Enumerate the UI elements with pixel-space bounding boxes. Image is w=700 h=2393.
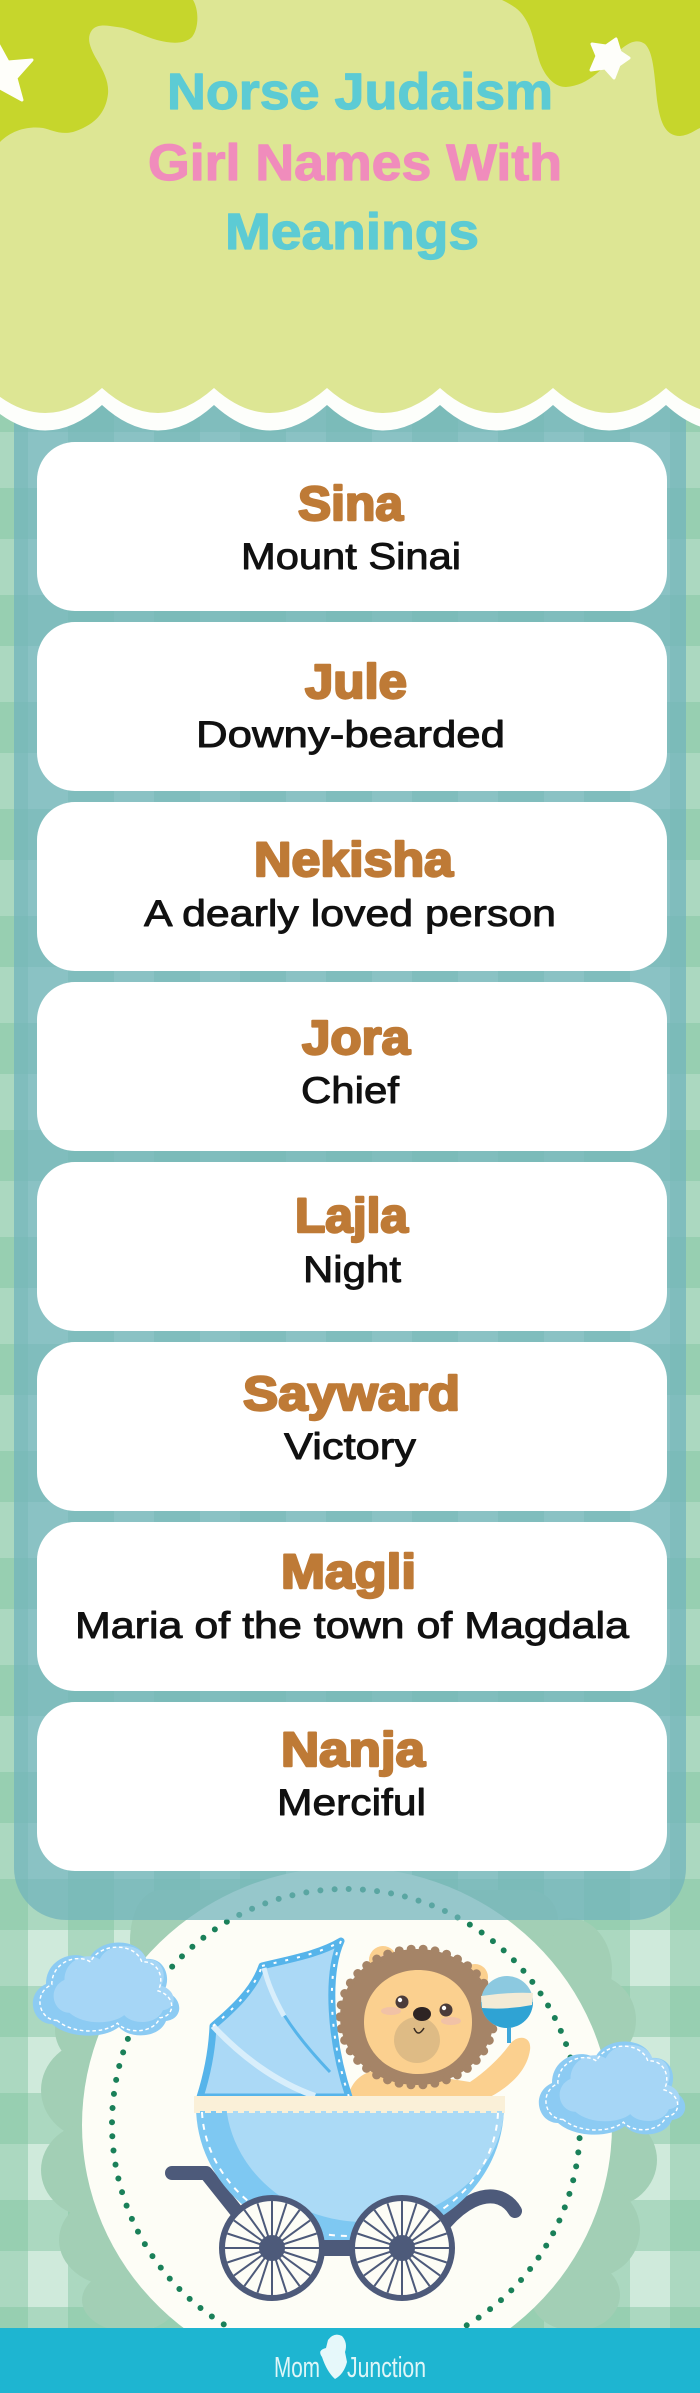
lion mane [340,1949,494,2085]
top-left blob [0,0,197,142]
card: Lajla [37,1162,667,1331]
card: Sina [37,442,667,611]
card: Nekisha: A dearly loved person [144,893,556,934]
card: Lajla: Lajla [295,1190,408,1243]
lion eyes [396,1996,408,2008]
star right [591,39,629,78]
canopy [200,1941,349,2097]
rattle [481,1976,533,2043]
icon: stroller [172,1941,515,2298]
handle right [446,2196,515,2222]
header [0,0,700,430]
card: Lajla: Night [303,1249,402,1290]
lion body and arm [348,2038,530,2097]
card: Nekisha [37,802,667,971]
card: Nanja: Nanja [281,1724,425,1777]
handle left [172,2173,245,2222]
bassinet [194,2096,505,2242]
icon: left cloud [33,1942,179,2036]
wheel right [352,2198,452,2298]
lion mouth [414,2028,424,2033]
footer [0,2328,700,2393]
card: Sina: Mount Sinai [241,536,461,577]
card: Magli [37,1522,667,1691]
icon: lion [340,1946,533,2097]
card: Nanja: Merciful [277,1782,426,1823]
card: Sina: Sina [298,478,403,531]
scalloped white edge [0,0,700,430]
title: Meanings [225,203,479,260]
card: Jule: Downy-bearded [196,714,505,755]
logo text: Mom [274,2352,320,2384]
star left [0,40,32,100]
card: Sayward [37,1342,667,1511]
dotted ring [112,1889,580,2359]
wheel left [222,2198,322,2298]
logo figure [320,2335,347,2379]
lion cheeks [381,2007,401,2015]
lion muzzle [394,2017,440,2063]
green scalloped backdrop behind the circle [41,1890,657,2332]
card: Jora: Chief [301,1070,400,1111]
card: Jule [37,622,667,791]
card: Nekisha: Nekisha [254,834,453,887]
card: Nanja [37,1702,667,1871]
axle [320,2240,360,2256]
top-right blob [502,0,700,136]
card: Magli: Magli [281,1546,416,1599]
header background [0,0,700,413]
title: Girl Names With [148,134,562,191]
lion face [364,1970,472,2074]
card: Sayward: Sayward [243,1368,460,1421]
title: Norse Judaism [167,63,553,120]
lion ears [369,1946,488,1990]
card: Jule: Jule [305,656,407,709]
card: Magli: Maria of the town of Magdala [75,1605,629,1646]
lion nose [413,2007,431,2021]
footer: Junction [347,2352,426,2384]
cream circle [82,1867,612,2383]
icon: right cloud [539,2042,685,2135]
title [148,63,562,260]
teal panel [14,300,686,1920]
card: Jora [37,982,667,1151]
card: Jora: Jora [302,1012,410,1065]
card: Sayward: Victory [284,1426,417,1467]
